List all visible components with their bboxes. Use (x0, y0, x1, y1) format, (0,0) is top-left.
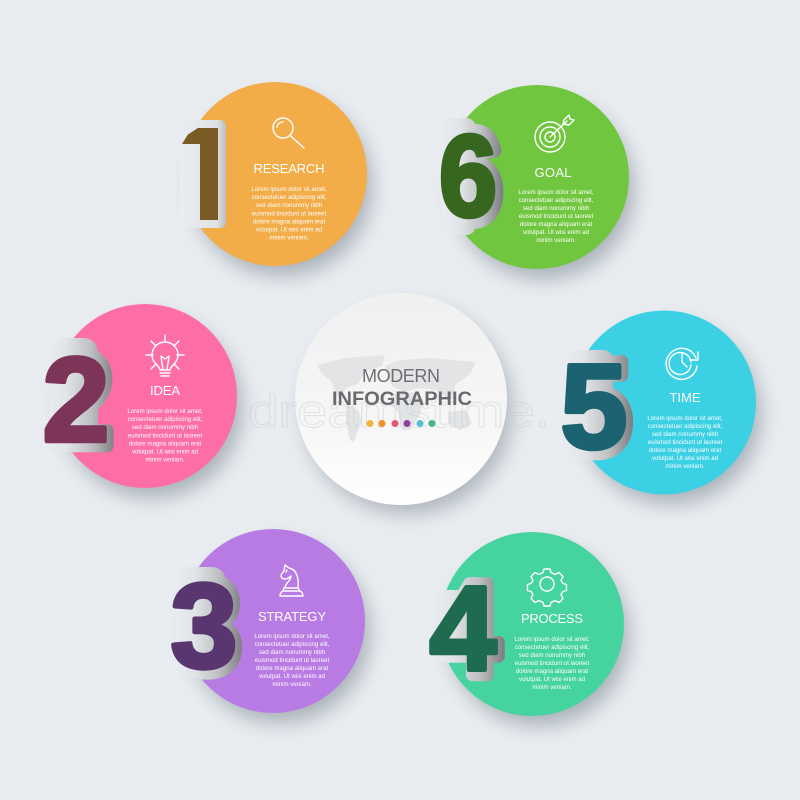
heading: modern: MODERN (362, 366, 440, 386)
text: goal body: volutpat. Ut wisi enim ad (523, 229, 589, 236)
number 5: 5 (561, 340, 627, 474)
text: idea body: dolore magna aliquam erat (129, 440, 202, 448)
number 1: 1 (167, 100, 251, 268)
text: strategy body: Lorem ipsum dolor sit amet, (254, 633, 330, 640)
text: strategy body: sed diam nonummy nibh (259, 649, 325, 656)
text: research body: euismod tincidunt ut laoreet (252, 210, 327, 218)
panel: centre disc (248, 293, 550, 514)
text: time body: consectetuer adipiscing elit, (648, 423, 723, 430)
panel: 2 idea: 2 (46, 326, 112, 474)
text: strategy body: volutpat. Ut wisi enim ad (259, 673, 325, 680)
text: goal body: sed diam nonummy nibh (523, 205, 589, 212)
number 3: 3 (171, 559, 237, 693)
text: strategy body: dolore magna aliquam erat (256, 665, 329, 672)
heading: idea: IDEA (150, 383, 180, 398)
world map (317, 355, 476, 442)
panel: 5 time: 5 (564, 333, 630, 481)
number 6: 6 (439, 112, 497, 241)
panel: 3 strategy: 3 (174, 552, 240, 700)
heading: infographic: INFOGRAPHIC (332, 388, 472, 410)
text: process body: dolore magna aliquam erat (516, 668, 589, 675)
text: idea body: minim veniam. (145, 456, 185, 464)
text: time body: Lorem ipsum dolor sit amet, (647, 415, 723, 422)
watermark: dreamstime. (248, 385, 550, 437)
text: research body: sed diam nonummy nibh (256, 202, 322, 209)
heading: process: PROCESS (521, 611, 583, 626)
text: strategy body: consectetuer adipiscing elit, (255, 641, 330, 648)
text: research body: consectetuer adipiscing elit, (252, 194, 327, 201)
text: idea body: volutpat. Ut wisi enim ad (132, 448, 198, 456)
icon: target (535, 115, 574, 152)
text: goal body: minim veniam. (536, 237, 576, 244)
text: idea body: consectetuer adipiscing elit, (128, 416, 203, 423)
icon: clock with arrow (666, 348, 698, 379)
text: idea body: Lorem ipsum dolor sit amet, (127, 408, 203, 415)
text: idea body: sed diam nonummy nibh (132, 424, 198, 431)
heading: goal: GOAL (534, 165, 572, 180)
text: process body: volutpat. Ut wisi enim ad (519, 676, 585, 683)
panel: 2 idea (43, 304, 242, 498)
panel: 3 strategy (171, 529, 370, 723)
icon: magnifier (273, 118, 304, 148)
text: process body: sed diam nonummy nibh (519, 652, 585, 659)
icon: chess knight (280, 565, 303, 596)
text: time body: volutpat. Ut wisi enim ad (652, 455, 718, 462)
panel: 6 goal: 6 (440, 103, 502, 249)
panel: 4 process: 4 (433, 555, 499, 703)
text: goal body: consectetuer adipiscing elit, (519, 197, 594, 204)
text: process body: Lorem ipsum dolor sit amet, (514, 636, 590, 643)
heading: strategy: STRATEGY (258, 609, 326, 624)
heading: time: TIME (670, 390, 701, 405)
text: process body: euismod tincidunt ut laoreet (515, 660, 590, 667)
text: time body: dolore magna aliquam erat (649, 447, 722, 454)
text: research body: minim veniam. (269, 234, 309, 242)
text: time body: euismod tincidunt ut laoreet (648, 439, 723, 446)
text: goal body: dolore magna aliquam erat (520, 221, 593, 228)
text: research body: volutpat. Ut wisi enim ad (256, 226, 322, 234)
text: research body: Lorem ipsum dolor sit amet, (251, 186, 327, 193)
text: strategy body: euismod tincidunt ut laoreet (255, 657, 330, 664)
text: process body: minim veniam. (532, 684, 572, 691)
text: goal body: euismod tincidunt ut laoreet (519, 213, 594, 220)
icon: gear (528, 569, 566, 606)
colour dots (366, 420, 436, 427)
icon: light bulb (146, 335, 184, 376)
heading: research: RESEARCH (254, 161, 324, 176)
text: goal body: Lorem ipsum dolor sit amet, (518, 189, 594, 196)
text: time body: minim veniam. (665, 463, 705, 470)
text: time body: sed diam nonummy nibh (652, 431, 718, 438)
text: research body: dolore magna aliquam erat (253, 218, 326, 226)
text: idea body: euismod tincidunt ut laoreet (128, 432, 203, 440)
panel: 5 time (561, 310, 761, 504)
panel: 6 goal (439, 85, 634, 279)
text: process body: consectetuer adipiscing elit, (515, 644, 590, 651)
panel: 1 research (167, 82, 372, 276)
panel: 4 process (430, 532, 629, 726)
text: strategy body: minim veniam. (272, 681, 312, 688)
number 2: 2 (43, 333, 109, 467)
number 4: 4 (430, 562, 497, 696)
